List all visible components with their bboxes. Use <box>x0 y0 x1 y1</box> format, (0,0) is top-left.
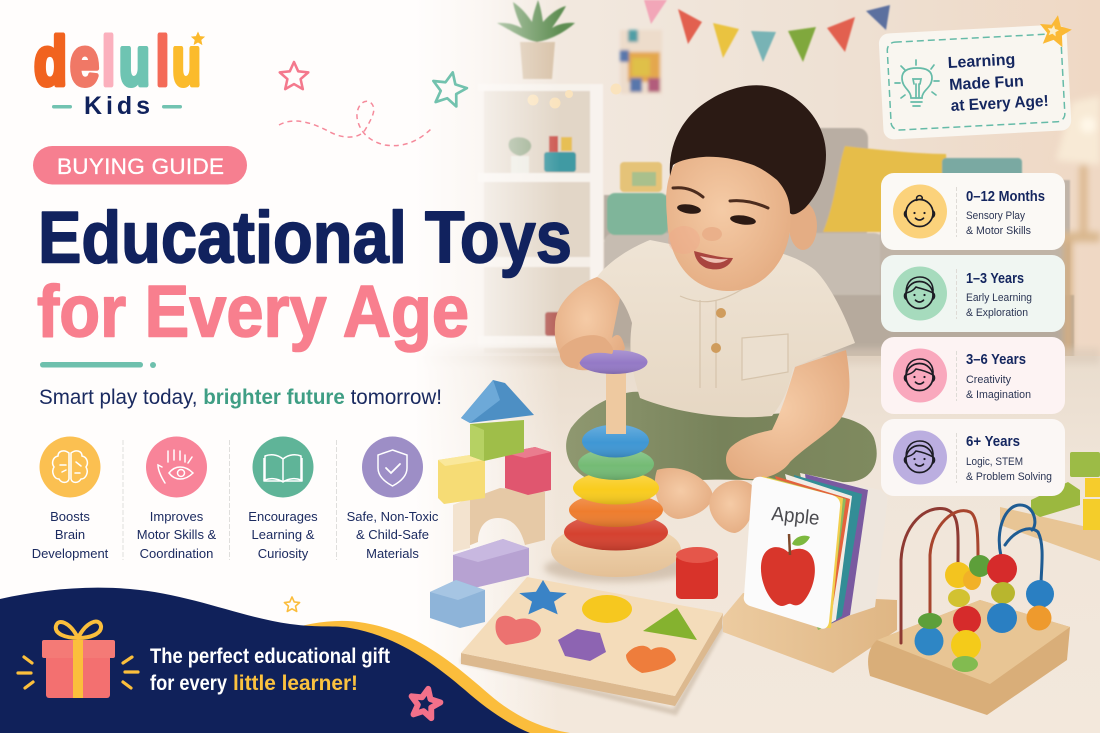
age card: 0-12 months: 0–12 Months <box>966 189 1045 205</box>
icon: brain <box>40 436 100 498</box>
bead maze toy <box>868 505 1070 715</box>
age card: 1-3 years: & Exploration <box>966 307 1028 319</box>
label: Coordination <box>140 546 213 561</box>
blue ring <box>582 424 649 458</box>
badge text: Made Fun <box>949 73 1024 94</box>
board top <box>461 577 723 696</box>
label <box>137 509 217 561</box>
ear <box>789 202 817 250</box>
right arm and hand <box>726 350 849 479</box>
age card: 3-6 years: & Imagination <box>966 389 1031 401</box>
banner navy wave <box>0 588 530 733</box>
card stack <box>762 473 887 630</box>
icon: baby face <box>893 184 947 238</box>
banner text: The perfect educational gift <box>150 645 390 668</box>
age card: 1-3 years <box>881 255 1065 332</box>
icon: older child face <box>893 430 947 484</box>
bunting garland <box>644 0 890 62</box>
bottom banner <box>0 588 570 733</box>
pink cube <box>505 447 551 495</box>
label: Improves <box>150 509 204 524</box>
badge text: Learning <box>947 51 1016 72</box>
purple block <box>453 539 529 589</box>
left foot <box>655 468 712 519</box>
yellow outline star <box>284 597 300 611</box>
logo: delulu Kids: e <box>70 23 99 100</box>
age card: 1-3 years: Early Learning <box>966 292 1032 304</box>
banner yellow edge <box>280 621 570 733</box>
logo: delulu Kids: l <box>156 23 169 100</box>
left white fade panel <box>0 0 560 733</box>
age card: 6+ years: & Problem Solving <box>966 471 1052 483</box>
badge text <box>947 51 1049 115</box>
label: Curiosity <box>258 546 309 561</box>
age card: 3-6 years: Creativity <box>966 374 1011 386</box>
carpet <box>0 356 1100 733</box>
left arm and hand <box>555 277 625 370</box>
orange ring <box>569 493 663 527</box>
flash cards in wooden stand <box>723 473 897 673</box>
wires <box>901 505 1042 643</box>
blue roof <box>461 380 534 423</box>
apple picture <box>761 534 815 606</box>
toy shadow <box>544 554 692 582</box>
green cube <box>470 420 524 461</box>
title: Educational Toys <box>38 198 572 278</box>
logo: delulu Kids: l <box>102 23 115 100</box>
title: for Every Age <box>37 272 469 352</box>
icon: shield check <box>362 436 423 498</box>
bookshelf <box>478 84 603 354</box>
label: Brain <box>55 527 85 542</box>
yellow ring <box>573 472 659 504</box>
card word: Apple <box>770 503 821 530</box>
learning made fun badge <box>878 12 1074 140</box>
label: Motor Skills & <box>137 527 217 542</box>
label <box>248 509 318 561</box>
label: & Child-Safe <box>356 527 429 542</box>
pink heart shape <box>495 616 541 645</box>
teal outline star <box>429 69 469 108</box>
icon: hand and eye <box>146 436 207 498</box>
label: Learning & <box>252 527 315 542</box>
icon: light bulb <box>895 60 939 106</box>
right foot <box>709 480 756 533</box>
age card: 0-12 months: & Motor Skills <box>966 225 1031 237</box>
t-shirt <box>597 240 855 417</box>
green ring <box>578 448 654 480</box>
logo: delulu Kids: u <box>119 23 150 100</box>
age card: 1-3 years: 1–3 Years <box>966 271 1024 287</box>
board shadow <box>461 625 723 712</box>
icon: toddler face <box>893 266 947 320</box>
pink star on banner <box>408 686 443 719</box>
age card: 6+ years: 6+ Years <box>966 434 1020 450</box>
benefit: safe materials <box>347 436 439 561</box>
post <box>606 372 626 434</box>
age card: 6+ years <box>881 419 1065 496</box>
benefit dividers <box>123 440 336 560</box>
badge card <box>878 24 1072 140</box>
logo: delulu Kids <box>34 23 205 120</box>
fingers on ring <box>560 335 613 368</box>
logo: delulu Kids: u <box>172 23 201 100</box>
red ring <box>564 514 668 550</box>
red cylinder block <box>676 547 718 599</box>
fairy light bokeh <box>528 84 622 108</box>
buying guide pill: BUYING GUIDE <box>57 154 224 179</box>
wood base <box>551 523 681 577</box>
buying guide pill <box>33 146 247 184</box>
logo: delulu Kids: d <box>34 23 67 100</box>
benefit: learning and curiosity <box>248 436 318 561</box>
title underline accent <box>40 362 156 368</box>
far-right wooden tray and blocks <box>1000 452 1100 561</box>
face <box>666 143 791 291</box>
icon: gift box <box>18 622 138 698</box>
age card: 6+ years: Logic, STEM <box>966 456 1023 468</box>
shirt details <box>680 284 788 388</box>
banner text: little learner! <box>233 672 358 695</box>
label: Boosts <box>50 509 90 524</box>
pink outline star <box>280 62 308 89</box>
icon: child face <box>893 348 947 402</box>
wooden stand <box>723 593 897 673</box>
wood arch <box>453 488 545 552</box>
badge star <box>1037 12 1074 48</box>
wooden block tower <box>430 380 551 628</box>
shape sorter puzzle board <box>461 577 723 712</box>
board side <box>461 613 723 706</box>
label: Development <box>32 546 109 561</box>
tagline: Smart play today, brighter future tomorrow! <box>39 386 442 409</box>
age card: 0-12 months: Sensory Play <box>966 210 1025 222</box>
banner text: for every <box>150 672 227 695</box>
yellow circle shape <box>582 595 632 623</box>
orange heart shape <box>626 646 676 673</box>
age card: 3-6 years <box>881 337 1065 414</box>
age card: 0-12 months <box>881 173 1065 250</box>
potted plant <box>497 0 575 79</box>
purple hexagon shape <box>558 629 606 661</box>
eyes, brows, nose, mouth <box>668 188 768 269</box>
front card <box>744 477 840 629</box>
label <box>32 509 109 561</box>
benefit: brain development <box>32 436 109 561</box>
blue block <box>430 580 485 628</box>
label <box>347 509 439 561</box>
baby <box>555 85 877 533</box>
stacking ring toy <box>544 335 692 582</box>
yellow cube <box>438 455 485 504</box>
banner text <box>150 645 390 695</box>
age card: 3-6 years: 3–6 Years <box>966 352 1026 368</box>
side table and lamp <box>1056 96 1100 360</box>
label: Materials <box>366 546 419 561</box>
label: Safe, Non-Toxic <box>347 509 439 524</box>
green triangle shape <box>643 608 697 640</box>
trousers <box>566 392 877 486</box>
maze wood base <box>868 600 1070 715</box>
hair <box>670 85 826 214</box>
sofa <box>604 128 1074 357</box>
purple ring <box>580 350 648 374</box>
badge text: at Every Age! <box>950 93 1049 115</box>
dashed loop trail <box>279 101 432 146</box>
wall picture <box>620 30 662 94</box>
blue star shape <box>519 580 567 614</box>
icon: open book <box>252 436 314 498</box>
benefit: motor skills <box>137 436 217 561</box>
logo: delulu Kids: Kids <box>84 92 150 120</box>
label: Encourages <box>248 509 318 524</box>
beads <box>914 626 944 656</box>
title <box>37 198 572 352</box>
